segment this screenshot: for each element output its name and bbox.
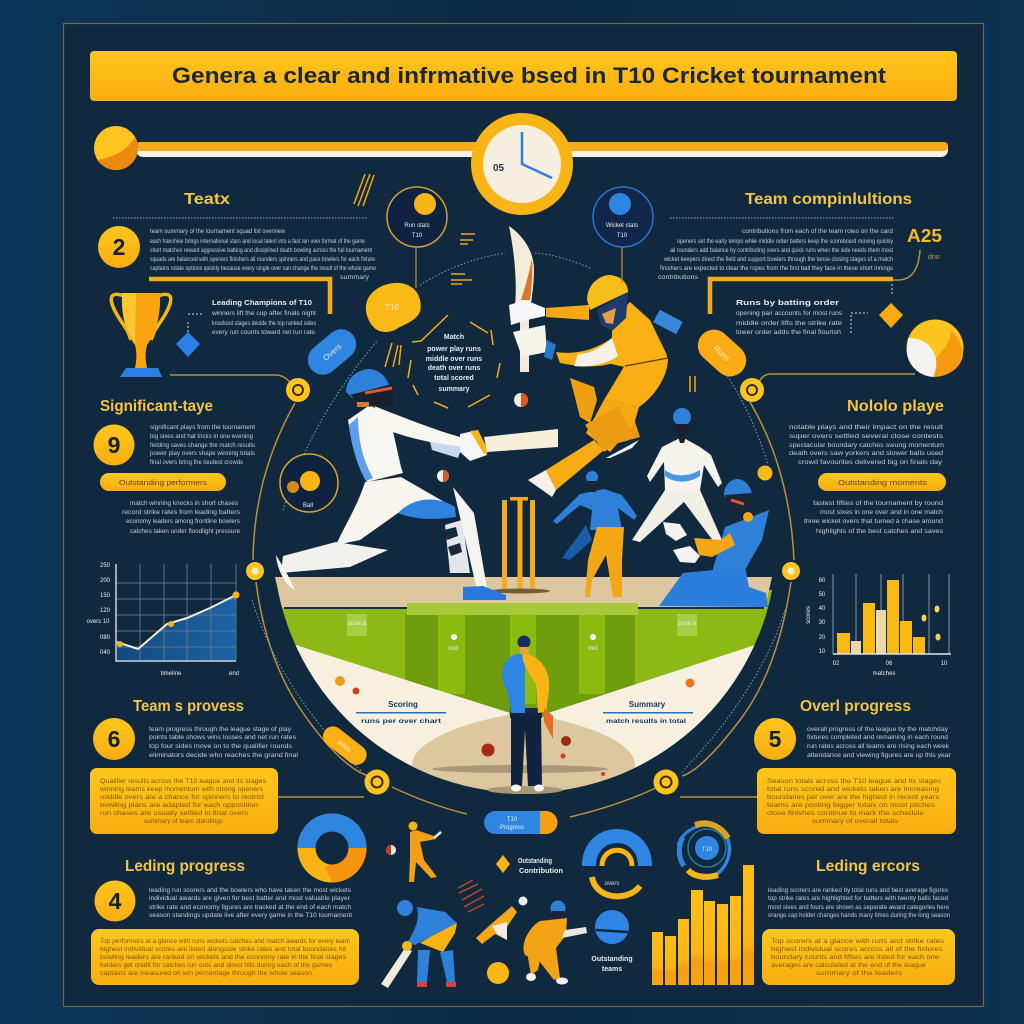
decorative stripes <box>354 174 695 392</box>
number badge 2: 2 <box>113 234 125 260</box>
bar chart bottom <box>652 865 754 985</box>
pill label: Outstanding moments <box>838 480 928 487</box>
tag pill: blue <box>302 323 362 381</box>
number badge 4: 4 <box>109 888 122 914</box>
figure: small orange player <box>386 822 441 882</box>
bar chart right: 10 <box>819 649 826 655</box>
tag pill: blue: Overs <box>321 342 343 363</box>
text block: middle order lifts the strike rate <box>736 320 842 327</box>
stumps <box>490 497 550 594</box>
text block <box>768 887 950 919</box>
bar chart right: 50 <box>819 592 826 598</box>
line chart: 250 <box>100 563 111 569</box>
text block: lower order adds the final flourish <box>736 329 841 336</box>
panel: overall progress right <box>680 698 956 834</box>
text block: highlights of the best catches and saves <box>816 528 944 535</box>
title banner: Genera a clear and infrmative bsed in T10 Cricket tournament <box>172 63 887 88</box>
bar chart right: 40 <box>819 606 826 612</box>
text block: big sixes and hat tricks in one evening <box>150 433 253 440</box>
top left badge circle: T10 <box>412 233 423 239</box>
figure: white batter <box>276 369 558 600</box>
top right badge circle <box>593 187 653 283</box>
connector badges <box>246 378 800 794</box>
callout box <box>90 768 278 834</box>
red speed stripes <box>458 880 484 912</box>
ring chart <box>678 823 729 877</box>
panel: leading progress left <box>91 858 359 985</box>
number badge 6 <box>93 718 135 760</box>
text block: short matches reward aggressive batting and disciplined death bowling across the full tournament <box>150 247 372 254</box>
bar chart right: 20 <box>819 635 826 641</box>
line chart: 200 <box>100 578 111 584</box>
icon: ball <box>906 320 964 377</box>
stat callout <box>907 226 942 261</box>
callout box: winning teams keep momentum with strong openers <box>99 786 264 793</box>
title banner <box>90 51 957 101</box>
tag pill: yellow lower: Wkts <box>336 739 353 755</box>
text block: final overs bring the loudest crowds <box>150 459 244 466</box>
panel: team progress left <box>90 698 364 834</box>
panel: team block top left <box>98 191 376 385</box>
text block: openers set the early tempo while middle order batters keep the scoreboard moving quickly <box>677 238 894 245</box>
text block: eliminators decide who reaches the grand final <box>149 752 299 759</box>
callout box <box>757 768 956 834</box>
text block: notable plays and their impact on the result <box>789 424 943 431</box>
text block: significant plays from the tournament <box>150 424 255 431</box>
callout box: bowling plans are adapted for each opposition <box>100 802 258 809</box>
octagon stat text: middle over runs <box>426 356 482 363</box>
label below blue ball <box>591 956 633 973</box>
tag blob: yellow <box>366 283 421 332</box>
text block beside trophy: winners lift the cup after finals night <box>211 310 316 317</box>
top left badge circle <box>387 187 447 288</box>
text block: all rounders add balance by contributing overs and quick runs when the side needs them most <box>670 247 893 254</box>
callout box <box>91 929 359 985</box>
line chart: 150 <box>100 593 111 599</box>
text block <box>789 424 944 466</box>
panel: notable plays right <box>789 398 946 535</box>
bar chart right: 30 <box>819 620 826 626</box>
text block: fixtures completed and remaining in each round <box>807 734 948 741</box>
line chart: timeline <box>161 671 182 677</box>
text block: fastest fifties of the tournament by round <box>813 500 943 507</box>
text block: squads are balanced with openers finishers all rounders spinners and pace bowlers for each fixture <box>150 256 375 263</box>
bottom pill label <box>484 811 558 834</box>
bar chart right: matches <box>873 671 895 677</box>
text block: season standings update live after every game in the T10 tournament <box>149 912 352 919</box>
tag pill: yellow lower <box>319 722 371 769</box>
callout box: total runs scored and wickets taken are increasing <box>767 786 939 793</box>
panel: team block top left: Teatx <box>184 191 230 208</box>
text block: leading scorers are ranked by total runs and best average figures <box>768 887 949 894</box>
line chart: 040 <box>100 650 111 656</box>
bar chart right <box>806 574 951 677</box>
tag pill: orange: Runs <box>712 344 732 363</box>
octagon stat text: summary <box>438 386 470 393</box>
callout box: bowling leaders are ranked on wickets and the economy rate in the final stages <box>100 954 347 961</box>
line chart: overs 10 <box>86 619 110 625</box>
text block: three wicket overs that turned a chase around <box>804 518 943 525</box>
octagon stat text: death over runs <box>428 365 480 372</box>
tag blob: yellow: T10 <box>385 303 399 312</box>
callout box: averages are calculated at the end of the league <box>771 962 926 969</box>
text block: run rates across all teams are rising each week <box>807 743 950 750</box>
text block <box>149 726 299 759</box>
callout box: middle overs are a chance for spinners to restrict <box>100 794 264 801</box>
text block beside trophy: Leading Champions of T10 <box>212 300 312 307</box>
diamond with label: Outstanding <box>518 858 552 865</box>
text block beside trophy <box>211 300 317 336</box>
icon: gold ball <box>487 962 509 984</box>
callout box: Top scorers at a glance with runs and strike rates <box>771 938 945 945</box>
gauge chart <box>589 836 645 896</box>
number badge 5: 5 <box>769 726 782 752</box>
bar chart right: 02 <box>833 661 840 667</box>
figure: crouching blue keeper <box>659 479 769 607</box>
text block: team progress through the league stage of play <box>149 726 292 733</box>
number badge 9 <box>94 424 134 466</box>
octagon stat text: power play runs <box>427 346 481 353</box>
field labels: mid <box>588 646 598 652</box>
stat callout: A25 <box>907 226 942 246</box>
text block: most sixes and fours are shown as separate award categories here <box>768 904 949 911</box>
inset circle left: Ball <box>303 503 313 509</box>
text block: each franchise brings international stars and local talent into a fast ten over format of the game <box>150 238 365 245</box>
field labels: zone a <box>348 621 367 627</box>
text block <box>736 300 843 336</box>
octagon stat text <box>408 315 500 408</box>
field labels: mid <box>448 646 458 652</box>
callout box: boundary counts and fifties are listed for each one <box>771 954 939 961</box>
diamond with label <box>496 855 563 875</box>
inset circle left <box>280 454 338 512</box>
figure: crouching orange player <box>523 900 587 984</box>
diamond with label: Contribution <box>519 868 563 875</box>
panel: significant plays left <box>94 398 256 535</box>
line chart: 120 <box>100 608 111 614</box>
number badge 4 <box>94 880 136 922</box>
callout box: Qualifier results across the T10 league and its stages <box>100 778 267 785</box>
callout box <box>762 929 955 985</box>
pitch strip <box>275 577 772 608</box>
text block: top strike rates are highlighted for batters with twenty balls faced <box>768 895 948 902</box>
callout box: close finishes continue to mark the schedule <box>767 810 924 817</box>
text block beside trophy: every run counts toward net run rate <box>212 329 315 336</box>
text block: power play overs shape winning totals <box>150 450 256 457</box>
icon: gold diamond <box>851 284 903 333</box>
top right badge circle: T10 <box>617 233 628 239</box>
icon: blue diamond <box>176 314 202 357</box>
number badge 2 <box>98 226 140 268</box>
callout box: summary of the leaders <box>816 970 903 977</box>
panel: team contributions top right: Team compinlultions <box>745 191 912 208</box>
line chart: 080 <box>100 635 111 641</box>
icon: trophy <box>111 293 171 377</box>
text block <box>658 228 894 281</box>
tag pill: orange <box>691 323 753 383</box>
number badge 6: 6 <box>108 726 120 752</box>
field labels: match results in total <box>606 719 686 725</box>
text block <box>804 500 944 535</box>
match balls <box>437 393 528 482</box>
text block: match winning knocks in short chases <box>130 500 239 507</box>
panel: notable plays right: Nololo playe <box>847 398 944 415</box>
figure: sprinting fielder <box>476 896 528 944</box>
text block: overall progress of the league by the matchday <box>807 726 949 733</box>
balls on field <box>335 676 694 794</box>
bar chart right: 60 <box>819 578 826 584</box>
text block: super overs settled several close contests <box>789 433 944 440</box>
figure: umpire <box>502 636 553 792</box>
number badge 5 <box>754 718 796 760</box>
line chart: end <box>229 671 239 677</box>
text block: orange cap holder changes hands many times during the long season <box>768 912 950 919</box>
text block: opening pair accounts for most runs <box>736 310 843 317</box>
pill label <box>818 473 946 491</box>
text block: Runs by batting order <box>736 300 839 307</box>
field labels: Scoring <box>388 700 418 709</box>
octagon stat text: Match <box>444 334 464 341</box>
bar chart right: 10 <box>941 661 948 667</box>
text block: top four sides move on to the qualifier rounds <box>149 743 293 750</box>
octagon stat text: total scored <box>434 375 474 382</box>
text block <box>122 500 241 535</box>
timeline bar with ball and clock <box>94 113 948 215</box>
field labels <box>347 614 697 725</box>
text block: strike rate and economy figures are tracked at the end of each match <box>149 904 351 911</box>
text block: attendance and viewing figures are up this year <box>807 752 952 759</box>
callout box: summary of overall totals <box>812 818 899 825</box>
bottom pill label: T10 <box>507 817 518 823</box>
text block: leading run scorers and the bowlers who have taken the most wickets <box>149 887 352 894</box>
central scene: cricket ground <box>270 577 780 810</box>
text block <box>150 424 256 466</box>
panel: leading scorers right: Leding ercors <box>816 858 920 875</box>
text block: finishers are expected to clear the ropes from the first ball they face in these short innings <box>660 265 894 272</box>
pill label: Outstanding performers <box>119 480 208 487</box>
text block: wicket keepers direct the field and support bowlers through the tense closing stages of a match <box>663 256 893 263</box>
stat callout: dno <box>928 254 940 261</box>
callout box: summary of team standings <box>144 818 224 825</box>
text block <box>149 887 352 919</box>
field labels: Summary <box>629 700 666 709</box>
bottom pill label: Progress <box>500 825 524 831</box>
text block: contributions from each of the team roles on the card <box>742 228 893 235</box>
text block <box>807 726 952 759</box>
icon: blue ball <box>595 910 629 944</box>
field labels: zone b <box>678 621 697 627</box>
callout box: boundaries per over are the highest in recent years <box>767 794 940 801</box>
text block: spectacular boundary catches swung momentum <box>789 442 944 449</box>
text block: team summary of the tournament squad list overview <box>150 228 285 235</box>
text block: points table shows wins losses and net run rates <box>149 734 297 741</box>
donut chart <box>298 814 366 882</box>
label below blue ball: teams <box>602 966 622 973</box>
panel: team progress left: Team s provess <box>133 698 244 715</box>
text block: death overs saw yorkers and slower balls used <box>789 450 943 457</box>
callout box: Season totals across the T10 league and its stages <box>767 778 942 785</box>
small blue card <box>653 310 683 334</box>
number badge 9: 9 <box>108 432 120 458</box>
callout box: teams are posting bigger totals on most pitches <box>767 802 936 809</box>
bar chart right: 06 <box>886 661 893 667</box>
top right badge circle: Wicket stats <box>606 223 638 229</box>
gauge chart: overs <box>605 881 619 887</box>
callout box: run chases are usually settled in final overs <box>100 810 249 817</box>
text block beside trophy: knockout stages decide the top ranked sides <box>212 320 317 327</box>
label below blue ball: Outstanding <box>591 956 633 963</box>
text block <box>150 228 376 281</box>
ring chart: T10 <box>702 847 713 853</box>
text block: contributions <box>658 274 699 281</box>
text block: catches taken under floodlight pressure <box>130 528 240 535</box>
callout box: highest individual scores across all of the fixtures <box>771 946 944 953</box>
panel: overall progress right: Overl progress <box>800 698 911 715</box>
panel: leading progress left: Leding progress <box>125 858 245 875</box>
text block: crowd favourites delivered big on finals day <box>798 459 943 466</box>
icon: clock <box>471 113 573 215</box>
decorative orbit lines <box>253 402 794 817</box>
callout box: highest individual scores are listed alongside strike rates and total boundaries hit <box>100 946 346 953</box>
pill label <box>100 473 226 491</box>
panel: leading scorers right <box>762 858 955 985</box>
text block: fielding saves change the match results <box>150 442 256 449</box>
panel: significant plays left: Significant-taye <box>100 398 213 415</box>
callout box: Top performers at a glance with runs wickets catches and match awards for every team <box>100 938 350 945</box>
figure: yellow batter <box>509 226 668 497</box>
panel: team contributions top right <box>658 191 964 384</box>
text block: captains rotate options quickly because every single over can change the result of the whole game <box>150 265 376 272</box>
text block: economy leaders among frontline bowlers <box>126 518 241 525</box>
bar chart right: scores <box>806 606 812 624</box>
top left badge circle: Run stats <box>404 223 430 229</box>
line chart <box>86 563 240 677</box>
field labels: runs per over chart <box>361 719 441 725</box>
text block: most sixes in one over and in one match <box>820 509 943 516</box>
text block: individual awards are given for best batter and most valuable player <box>149 895 351 902</box>
callout box: fielders get credit for catches run outs and direct hits during each of the games <box>100 962 333 969</box>
icon: clock: 05 <box>493 163 505 174</box>
text block: record strike rates from leading batters <box>122 509 241 516</box>
figure: white fielder <box>632 408 722 542</box>
figure: bending batter <box>381 900 457 988</box>
figure: blue fielder <box>553 471 637 597</box>
text block: summary <box>340 274 370 281</box>
callout box: captains are measured on win percentage through the whole season <box>100 970 312 977</box>
